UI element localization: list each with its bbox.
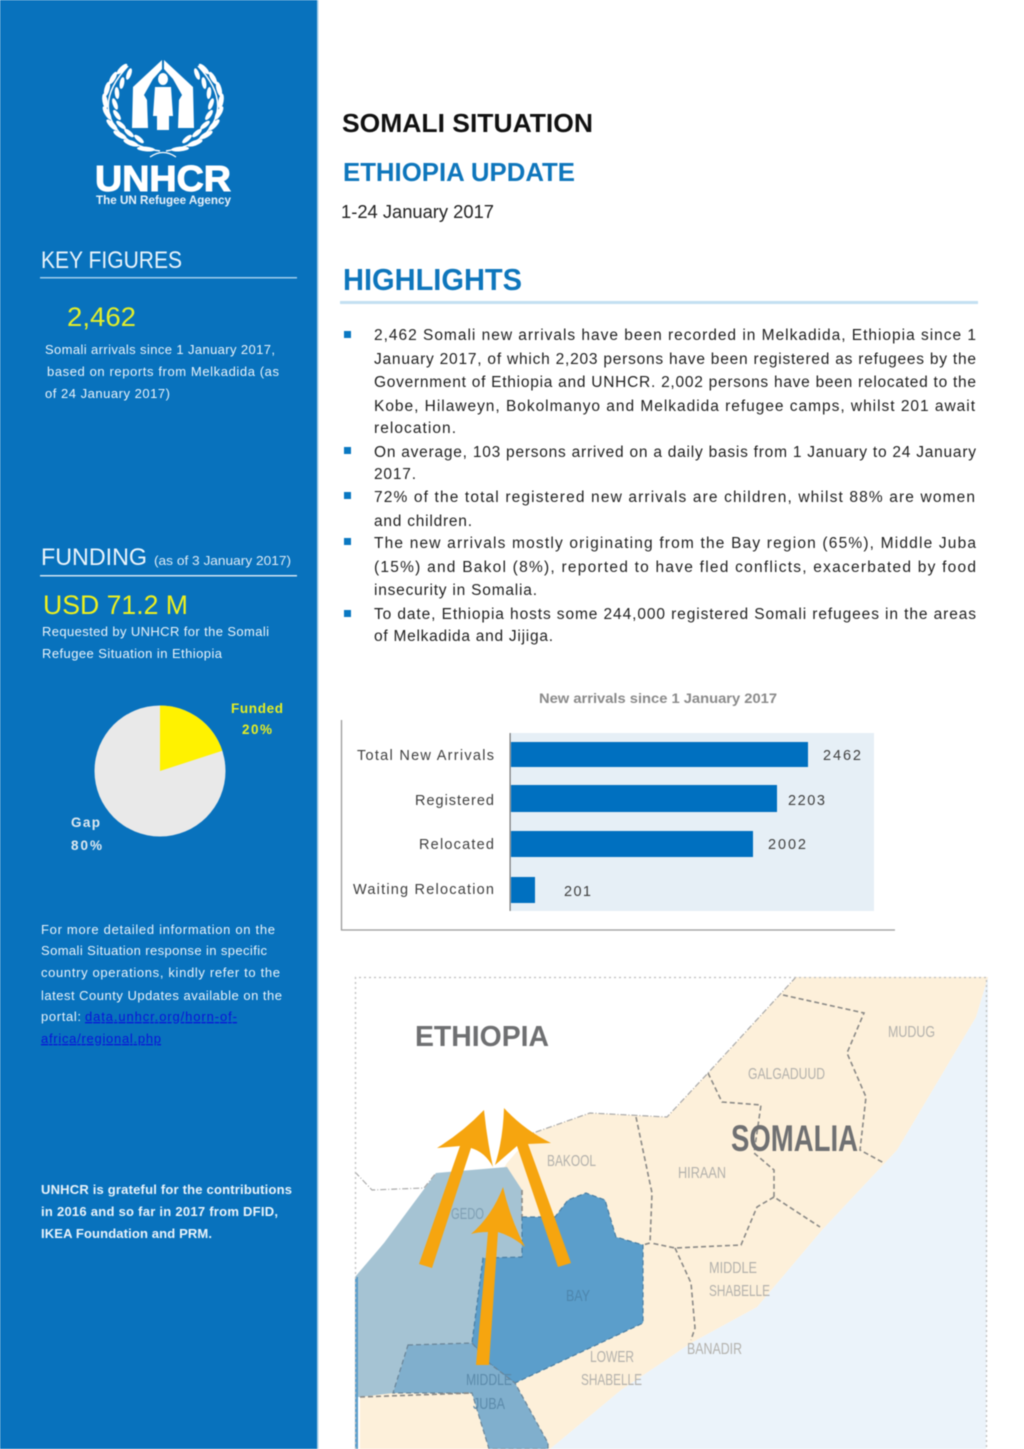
map label: Ethiopia: ETHIOPIA <box>415 1021 549 1053</box>
map labels: regions: MIDDLE <box>709 1260 757 1277</box>
heading: funding <box>40 544 297 576</box>
bullet 2: On average, 103 persons arrived on a daily basis from 1 January to 24 January <box>374 444 976 461</box>
text block: highlights list <box>344 327 976 645</box>
map labels: regions: SHABELLE <box>709 1283 770 1300</box>
bullet 1: relocation. <box>374 420 456 437</box>
map labels: regions: BAY <box>566 1288 590 1305</box>
text block: more information <box>41 922 282 1046</box>
heading: key figures: KEY FIGURES <box>41 247 182 274</box>
heading: funding: (as of 3 January 2017) <box>154 553 291 568</box>
map labels: regions: MIDDLE <box>466 1372 512 1389</box>
bullet 5 <box>344 606 976 645</box>
map labels: regions: BAKOOL <box>547 1153 596 1170</box>
map region: Bay <box>472 1193 643 1383</box>
icon: right laurel <box>150 62 225 157</box>
map: region boundaries <box>360 995 884 1397</box>
arrow: centre <box>471 1187 525 1365</box>
bar: registered: Registered <box>415 793 494 809</box>
bar: total new arrivals <box>357 742 861 767</box>
map labels: regions: JUBA <box>473 1396 505 1413</box>
text block: acknowledgement <box>41 1182 292 1241</box>
bar: waiting relocation <box>353 877 591 903</box>
bullet 1: 2,462 Somali new arrivals have been recorded in Melkadida, Ethiopia since 1 <box>374 327 976 344</box>
bar: total new arrivals: Total New Arrivals <box>357 748 494 764</box>
title: SOMALI SITUATION <box>342 108 593 138</box>
bullet 3 <box>344 489 975 530</box>
map: Somalia and Ethiopia <box>355 977 988 1449</box>
map labels: regions: SHABELLE <box>581 1372 642 1389</box>
date: 1-24 January 2017 <box>341 202 494 222</box>
pie label: gap <box>71 815 102 853</box>
bar: waiting relocation: 201 <box>564 884 591 900</box>
bullet 1: Government of Ethiopia and UNHCR. 2,002 persons have been relocated to the <box>374 374 976 391</box>
text block: more information: Somali Situation response in specific <box>41 943 268 958</box>
bullet 4: insecurity in Somalia. <box>374 582 537 599</box>
icon: left laurel <box>101 62 160 152</box>
map sea <box>550 977 988 1449</box>
text block: arrivals description: Somali arrivals since 1 January 2017, <box>45 342 275 357</box>
bar: relocated <box>419 831 806 857</box>
bar: waiting relocation: Waiting Relocation <box>353 882 494 898</box>
chart title: New arrivals since 1 January 2017 <box>539 690 777 706</box>
heading: funding: FUNDING <box>41 544 147 571</box>
pie label: gap: Gap <box>71 815 100 830</box>
text block: arrivals description: of 24 January 2017) <box>45 386 170 401</box>
bar: total new arrivals: 2462 <box>823 748 861 764</box>
text block: more information: country operations, kindly refer to the <box>41 965 280 980</box>
arrow: left <box>419 1110 493 1268</box>
key figure: funding requested: USD 71.2 M <box>43 590 188 620</box>
text block: more information: For more detailed information on the <box>41 922 275 937</box>
text block: acknowledgement: UNHCR is grateful for the contributions <box>41 1182 292 1197</box>
text block: more information: portal: <box>41 1009 81 1024</box>
text block: more information: africa/regional.php <box>41 1031 161 1046</box>
map region: Middle Juba <box>393 1343 548 1449</box>
bullet 5: To date, Ethiopia hosts some 244,000 registered Somali refugees in the areas <box>374 606 976 623</box>
bullet 1: Kobe, Hilaweyn, Bokolmanyo and Melkadida refugee camps, whilst 201 await <box>374 398 976 415</box>
bar: relocated: 2002 <box>768 837 806 853</box>
heading: highlights: HIGHLIGHTS <box>343 262 522 297</box>
map labels: regions: GALGADUUD <box>748 1066 825 1083</box>
map labels: regions: GEDO <box>451 1206 484 1223</box>
map labels: regions: LOWER <box>590 1349 634 1366</box>
logo tagline: The UN Refugee Agency <box>96 195 232 207</box>
map labels: regions: MUDUG <box>888 1024 935 1041</box>
map region: Gedo <box>355 1167 522 1397</box>
text block: acknowledgement: IKEA Foundation and PRM. <box>41 1226 212 1241</box>
bar: registered <box>415 785 825 812</box>
text block: acknowledgement: in 2016 and so far in 2017 from DFID, <box>41 1204 278 1219</box>
bar: relocated: Relocated <box>419 837 494 853</box>
key figure: arrivals number: 2,462 <box>67 302 136 332</box>
pie label: funded <box>231 701 283 737</box>
logo wordmark: UNHCR <box>95 158 231 199</box>
text block: funding description: Requested by UNHCR for the Somali <box>42 624 269 639</box>
bullet 4: (15%) and Bakol (8%), reported to have fled conflicts, exacerbated by food <box>374 559 976 576</box>
text block: arrivals description: based on reports from Melkadida (as <box>47 364 280 379</box>
map region: Somalia base <box>360 977 988 1449</box>
bullet 5: of Melkadida and Jijiga. <box>374 628 553 645</box>
bullet 4 <box>344 535 976 599</box>
pie chart: funding <box>71 701 283 853</box>
bullet 2 <box>344 444 976 483</box>
panel: sidebar <box>0 0 318 1449</box>
text block: more information: latest County Updates available on the <box>41 988 282 1003</box>
map labels: regions <box>451 1024 935 1413</box>
map: international border <box>355 977 796 1190</box>
pie label: funded: 20% <box>242 722 272 737</box>
subtitle: ETHIOPIA UPDATE <box>343 157 575 187</box>
icon: sheltering hands and person <box>132 60 194 130</box>
bullet 3: 72% of the total registered new arrivals are children, whilst 88% are women <box>374 489 975 506</box>
bullet 1 <box>344 327 976 437</box>
text block: funding description: Refugee Situation in Ethiopia <box>42 646 223 661</box>
pie label: funded: Funded <box>231 701 283 716</box>
text block: funding description <box>42 624 269 661</box>
map labels: regions: HIRAAN <box>678 1165 726 1182</box>
bar chart: new arrivals <box>342 690 895 930</box>
heading: highlights <box>340 262 978 304</box>
text block: arrivals description <box>45 342 280 401</box>
arrow: right <box>495 1108 571 1267</box>
bar: registered: 2203 <box>788 793 825 809</box>
bullet 2: 2017. <box>374 466 416 483</box>
bullet 1: January 2017, of which 2,203 persons have been registered as refugees by the <box>374 351 976 368</box>
pie label: gap: 80% <box>71 838 102 853</box>
text block: more information: data.unhcr.org/horn-of- <box>85 1009 237 1024</box>
map label: Somalia: SOMALIA <box>731 1118 858 1159</box>
bullet 3: and children. <box>374 513 472 530</box>
map labels: regions: BANADIR <box>687 1341 742 1358</box>
map frame <box>356 978 986 1449</box>
bullet 4: The new arrivals mostly originating from the Bay region (65%), Middle Juba <box>374 535 976 552</box>
icon: UNHCR logo <box>95 60 232 207</box>
